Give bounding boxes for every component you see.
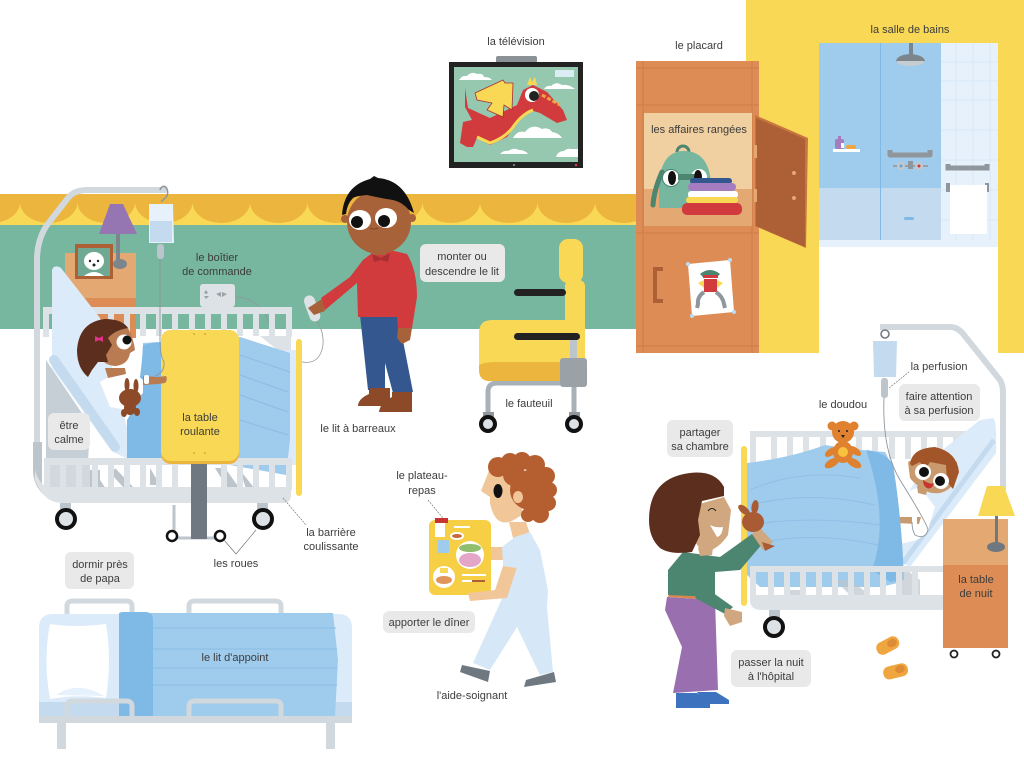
night table with yellow lamp [943, 486, 1015, 658]
label: le plateau-repas [396, 470, 448, 518]
television [449, 56, 583, 168]
neck [509, 522, 530, 538]
lower arm [695, 585, 733, 614]
icon: teddy bear [823, 421, 863, 470]
label: les roues [214, 530, 259, 570]
nurse carrying a meal tray [429, 452, 557, 687]
panel: room wall with scalloped frieze [0, 194, 652, 329]
IV bag and tube [149, 186, 174, 376]
icon: remote [302, 294, 322, 323]
bubble: être calme [48, 413, 90, 450]
tiled wall [941, 43, 998, 240]
bubble: apporter le dîner: apporter le dîner [389, 617, 470, 629]
lower rail [35, 458, 292, 503]
bubble: faire attention à sa perfusion: à sa perfusion [904, 405, 974, 417]
label: le lit d'appoint: le lit d'appoint [202, 652, 268, 664]
hands [397, 328, 412, 344]
bubble: être calme: calme [54, 434, 84, 446]
bubble: passer la nuit à l'hôpital [731, 650, 811, 687]
raised hand and toy [736, 500, 775, 551]
over-bed table [161, 330, 239, 541]
pillow [46, 624, 109, 699]
icon: dragon [460, 77, 567, 147]
frame [67, 701, 281, 716]
head [481, 468, 522, 523]
label: la barrière coulissante: la barrière [306, 527, 356, 539]
label: le placard: le placard [675, 40, 723, 52]
bubble: passer la nuit à l'hôpital: à l'hôpital [748, 671, 794, 683]
front arm [468, 566, 517, 601]
mattress edge [285, 350, 297, 465]
bubble: dormir près de papa: dormir près [72, 559, 128, 571]
upper rail [43, 307, 292, 352]
hospital bed with railings [33, 190, 323, 528]
label: le plateau-repas: repas [408, 485, 436, 497]
label: la perfusion [889, 361, 967, 388]
shirt [321, 250, 417, 328]
IV pole [37, 190, 165, 445]
left bed control box [200, 284, 271, 331]
label: la table de nuit: de nuit [959, 588, 993, 600]
bubble: faire attention à sa perfusion [899, 384, 980, 421]
bubble: partager sa chambre: sa chambre [671, 441, 729, 453]
boy in bed [889, 447, 959, 545]
girl's arm over the table [143, 375, 167, 385]
shoes [460, 665, 490, 682]
bubble: partager sa chambre: partager [680, 427, 720, 439]
folding extra bed [39, 601, 352, 749]
tunic [502, 532, 548, 593]
label: la table roulante: roulante [180, 426, 220, 438]
head [698, 540, 714, 556]
icon: folded clothes [682, 178, 742, 215]
cupboard [636, 61, 808, 353]
icon: cupboard handle [655, 269, 663, 301]
label: le boîtier de commande: de commande [182, 266, 252, 278]
left bed night table with lamp and photo [65, 204, 137, 338]
label: le fauteuil: le fauteuil [505, 398, 553, 410]
bubble: monter ou descendre le lit [420, 244, 505, 282]
bed wheels [57, 503, 272, 528]
belt [668, 594, 715, 600]
bubble: dormir près de papa: de papa [80, 573, 121, 585]
label: la barrière coulissante [283, 498, 359, 553]
label: la télévision: la télévision [487, 36, 545, 48]
girl [77, 319, 143, 417]
label: la table de nuit: la table [958, 574, 994, 586]
icon: lamp [99, 204, 137, 269]
bubble: partager sa chambre [667, 420, 733, 457]
perfusion bag and tube [873, 330, 928, 537]
icon: open door [754, 115, 808, 248]
backrest [52, 266, 130, 460]
trousers [473, 590, 553, 675]
neck and head [373, 245, 386, 255]
upper rail [750, 431, 990, 466]
icon: slippers [874, 634, 909, 681]
icon: brown bunny toy [119, 378, 141, 417]
bubble: passer la nuit à l'hôpital: passer la nuit [738, 657, 804, 669]
backrest [897, 418, 996, 567]
woman in green sweater with brown toy [649, 473, 775, 708]
armchair [479, 239, 587, 431]
bubble: faire attention à sa perfusion: faire attention [906, 391, 972, 403]
icon: soap shelf [833, 136, 860, 152]
label: la perfusion: la perfusion [911, 361, 967, 373]
label: les roues: les roues [214, 558, 259, 570]
cable to remote [302, 321, 323, 362]
label: le plateau-repas: le plateau- [396, 470, 448, 482]
icon: towel [946, 164, 989, 234]
icon: dog photo [75, 244, 113, 279]
back arm [490, 547, 505, 560]
icon: robot poster [686, 258, 736, 318]
curly hair [488, 452, 557, 523]
second bed lower rail [741, 446, 948, 636]
label: le doudou: le doudou [819, 399, 867, 411]
trousers [360, 315, 413, 393]
blanket [119, 613, 338, 716]
second bed: back rail and frame [750, 327, 1003, 567]
yellow sliding bar [296, 339, 302, 496]
icon: meal tray [429, 518, 491, 595]
shower wall [819, 43, 941, 188]
boy in red shirt holding remote [302, 176, 417, 412]
clouds [459, 73, 578, 157]
bubble: monter ou descendre le lit: monter ou [437, 251, 487, 263]
boots [358, 388, 412, 412]
label: les affaires rangées: les affaires rangées [651, 124, 747, 136]
bed head base [33, 442, 100, 502]
panel: bathroom wall [746, 0, 1024, 353]
bubble: apporter le dîner [383, 611, 475, 633]
blanket [127, 337, 290, 475]
icon: shower head [896, 43, 925, 66]
bubble: être calme: être [60, 420, 78, 432]
icon: backpack [653, 146, 711, 208]
label: le boîtier de commande: le boîtier [196, 252, 238, 264]
bubble: monter ou descendre le lit: descendre le lit [425, 266, 499, 278]
icon: taps [890, 150, 930, 220]
label: l'aide-soignant: l'aide-soignant [437, 690, 507, 702]
label: la barrière coulissante: coulissante [303, 541, 359, 553]
trousers [665, 597, 718, 693]
label: le lit à barreaux: le lit à barreaux [320, 423, 396, 435]
sweater [668, 534, 763, 597]
label: la salle de bains: la salle de bains [871, 24, 950, 36]
bubble: dormir près de papa [65, 552, 134, 589]
second bed blanket [747, 445, 904, 587]
shoes [676, 693, 710, 708]
label: la table roulante: la table [182, 412, 218, 424]
